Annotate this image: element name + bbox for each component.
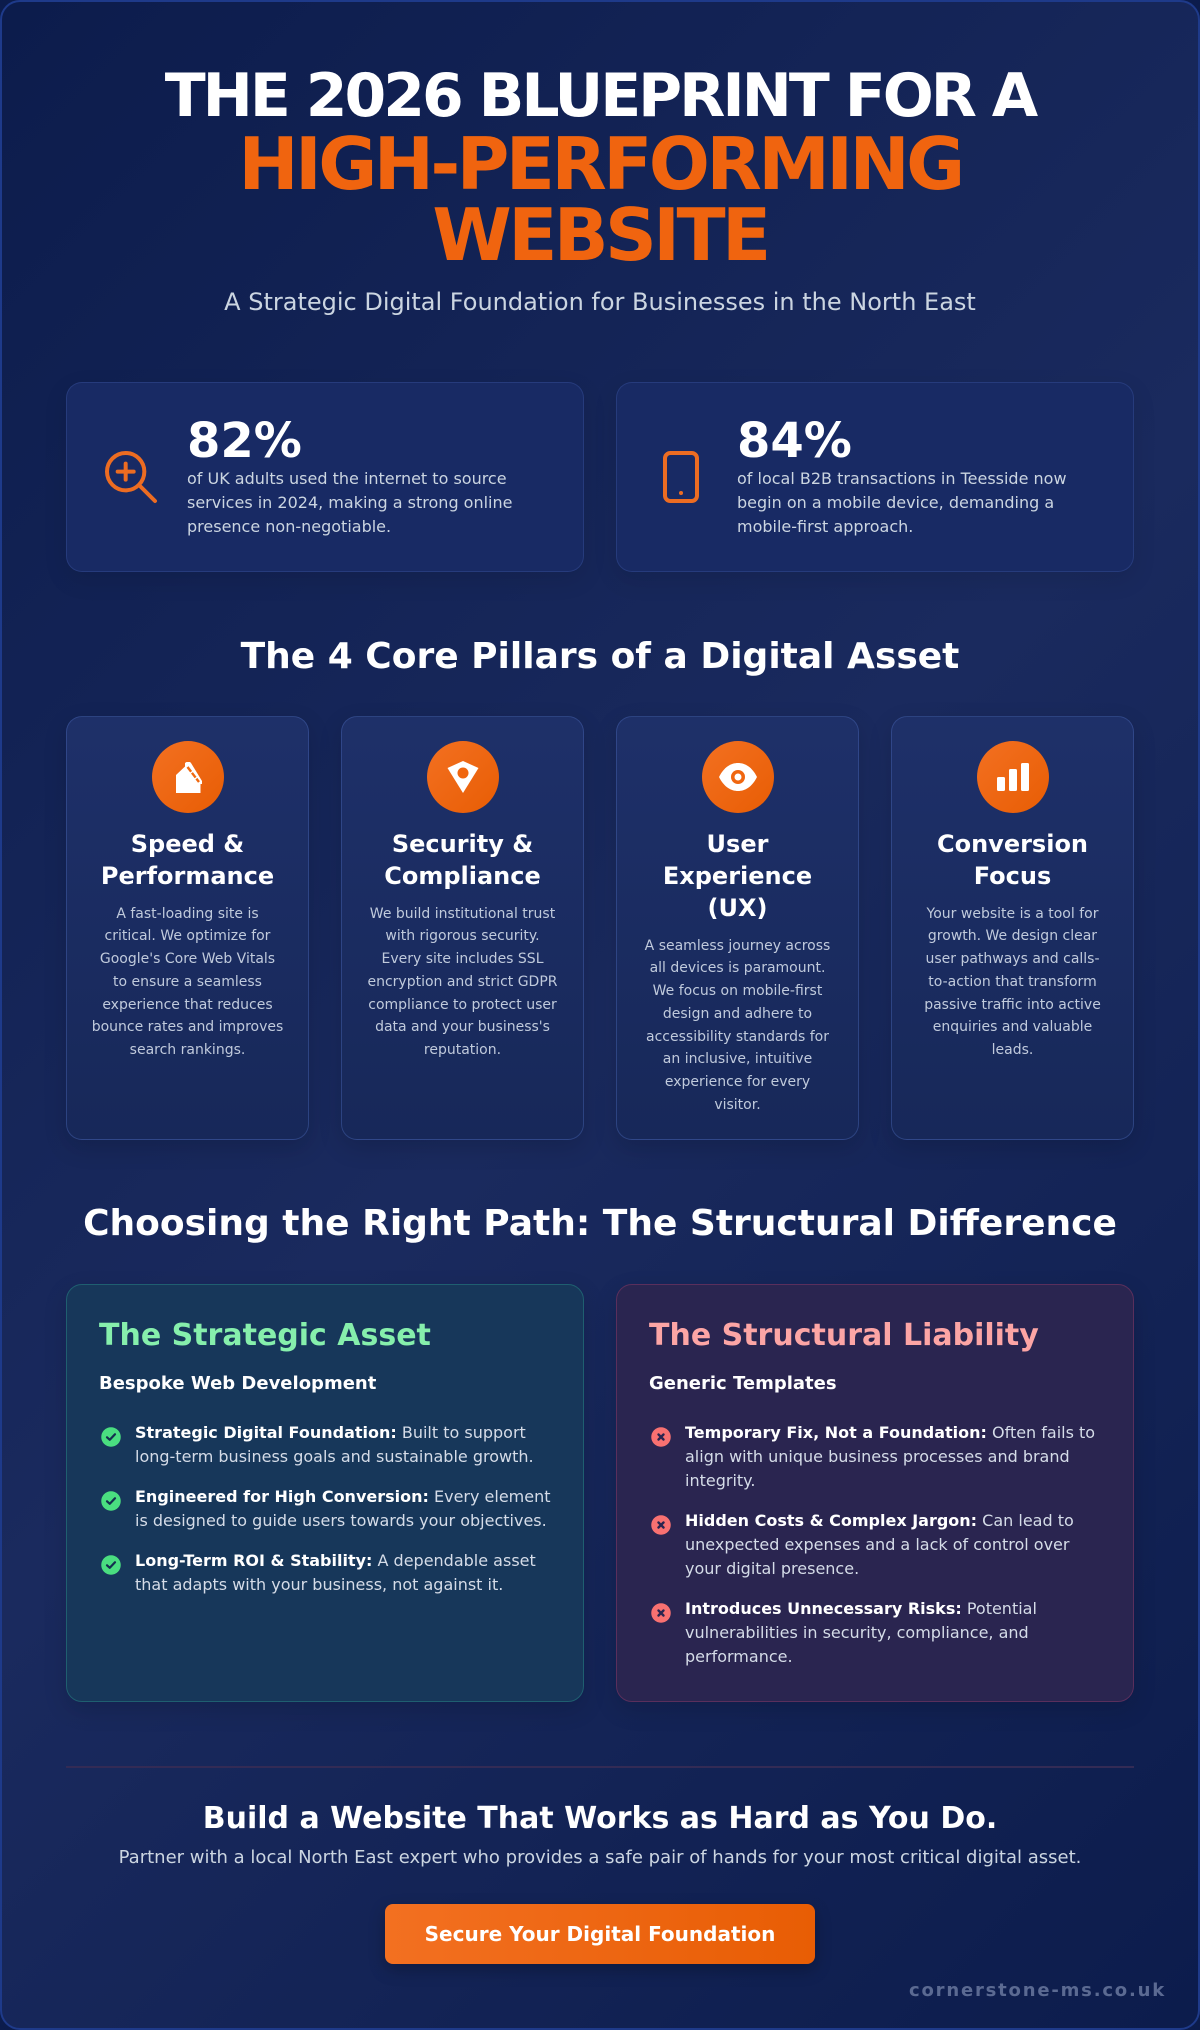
closing text: Partner with a local North East expert who provides a safe pair of hands for your most critical digital asset. bbox=[119, 1847, 1081, 1868]
pillar text: A fast-loading site is critical. We optimize for Google's Core Web Vitals to ensure a seamless experience that reduces bounce rates and improves search rankings. bbox=[92, 906, 283, 1058]
pillar heading: Conversion Focus bbox=[937, 830, 1088, 890]
item text: Engineered for High Conversion: Every element is designed to guide users towards your objectives. bbox=[135, 1487, 551, 1530]
stat number: 84% bbox=[737, 413, 852, 469]
list item: long-term ROI bbox=[101, 1551, 536, 1594]
website footer: cornerstone-ms.co.uk bbox=[909, 1980, 1166, 2001]
pillar text: A seamless journey across all devices is paramount. We focus on mobile-first design and adhere to accessibility standards for an inclusive, intuitive experience for every visitor. bbox=[645, 938, 830, 1113]
icon: check bbox=[101, 1555, 121, 1575]
stat text: of local B2B transactions in Teesside now begin on a mobile device, demanding a mobile-first approach. bbox=[737, 469, 1067, 536]
item text: Strategic Digital Foundation: Built to support long-term business goals and sustainable growth. bbox=[135, 1423, 534, 1466]
panel heading: The Strategic Asset bbox=[99, 1318, 431, 1353]
pillar heading: User Experience (UX) bbox=[663, 830, 812, 922]
icon: speed bbox=[152, 741, 224, 813]
list item: strategic digital foundation bbox=[101, 1423, 534, 1466]
heading: structural difference: Choosing the Right Path: The Structural Difference bbox=[83, 1203, 1117, 1244]
panel: speed and performance bbox=[66, 716, 309, 1140]
panel subheading: Generic Templates bbox=[649, 1373, 837, 1394]
list item: unnecessary risks bbox=[651, 1599, 1037, 1666]
icon: cross bbox=[651, 1603, 671, 1623]
panel: the strategic asset bbox=[66, 1284, 584, 1702]
item text: Temporary Fix, Not a Foundation: Often fails to align with unique business processes and brand integrity. bbox=[685, 1423, 1095, 1490]
title bbox=[165, 61, 1038, 277]
icon: cross bbox=[651, 1515, 671, 1535]
title: WEBSITE bbox=[432, 193, 768, 277]
subtitle: A Strategic Digital Foundation for Businesses in the North East bbox=[224, 288, 976, 316]
list item: temporary fix bbox=[651, 1423, 1095, 1490]
icon: mobile phone bbox=[663, 451, 699, 503]
pillar heading: Speed & Performance bbox=[101, 830, 274, 890]
panel: conversion focus bbox=[891, 716, 1134, 1140]
panel: the structural liability bbox=[616, 1284, 1134, 1702]
call to action button bbox=[385, 1904, 815, 1964]
stat card: 82% bbox=[66, 382, 584, 572]
item text: Hidden Costs & Complex Jargon: Can lead to unexpected expenses and a lack of control over your digital presence. bbox=[685, 1511, 1074, 1578]
call to action button: Secure Your Digital Foundation bbox=[425, 1922, 775, 1946]
icon: eye bbox=[702, 741, 774, 813]
title: HIGH-PERFORMING bbox=[238, 122, 962, 206]
icon: check bbox=[101, 1491, 121, 1511]
closing heading: Build a Website That Works as Hard as You Do. bbox=[203, 1801, 997, 1836]
panel heading: The Structural Liability bbox=[649, 1318, 1039, 1353]
icon: cross bbox=[651, 1427, 671, 1447]
heading: core pillars: The 4 Core Pillars of a Digital Asset bbox=[241, 636, 959, 677]
icon: magnifying glass bbox=[105, 451, 158, 504]
pillar heading: Security & Compliance bbox=[384, 830, 541, 890]
title: THE 2026 BLUEPRINT FOR A bbox=[165, 61, 1035, 131]
list item: hidden costs bbox=[651, 1511, 1074, 1578]
item text: Long-Term ROI & Stability: A dependable asset that adapts with your business, not against it. bbox=[135, 1551, 536, 1594]
pillar text: We build institutional trust with rigorous security. Every site includes SSL encryption and strict GDPR compliance to protect user data and your business's reputation. bbox=[367, 906, 558, 1058]
panel: security and compliance bbox=[341, 716, 584, 1140]
icon: bar chart bbox=[977, 741, 1049, 813]
stat card: 84% bbox=[616, 382, 1134, 572]
icon: security bbox=[427, 741, 499, 813]
icon: check bbox=[101, 1427, 121, 1447]
list item: high conversion bbox=[101, 1487, 551, 1530]
stat text: of UK adults used the internet to source services in 2024, making a strong online presence non-negotiable. bbox=[187, 469, 512, 536]
panel subheading: Bespoke Web Development bbox=[99, 1373, 376, 1394]
pillar text: Your website is a tool for growth. We design clear user pathways and calls-to-action that transform passive traffic into active enquiries and valuable leads. bbox=[924, 906, 1101, 1058]
item text: Introduces Unnecessary Risks: Potential vulnerabilities in security, compliance, and performance. bbox=[685, 1599, 1037, 1666]
panel: user experience bbox=[616, 716, 859, 1140]
stat number: 82% bbox=[187, 413, 302, 469]
